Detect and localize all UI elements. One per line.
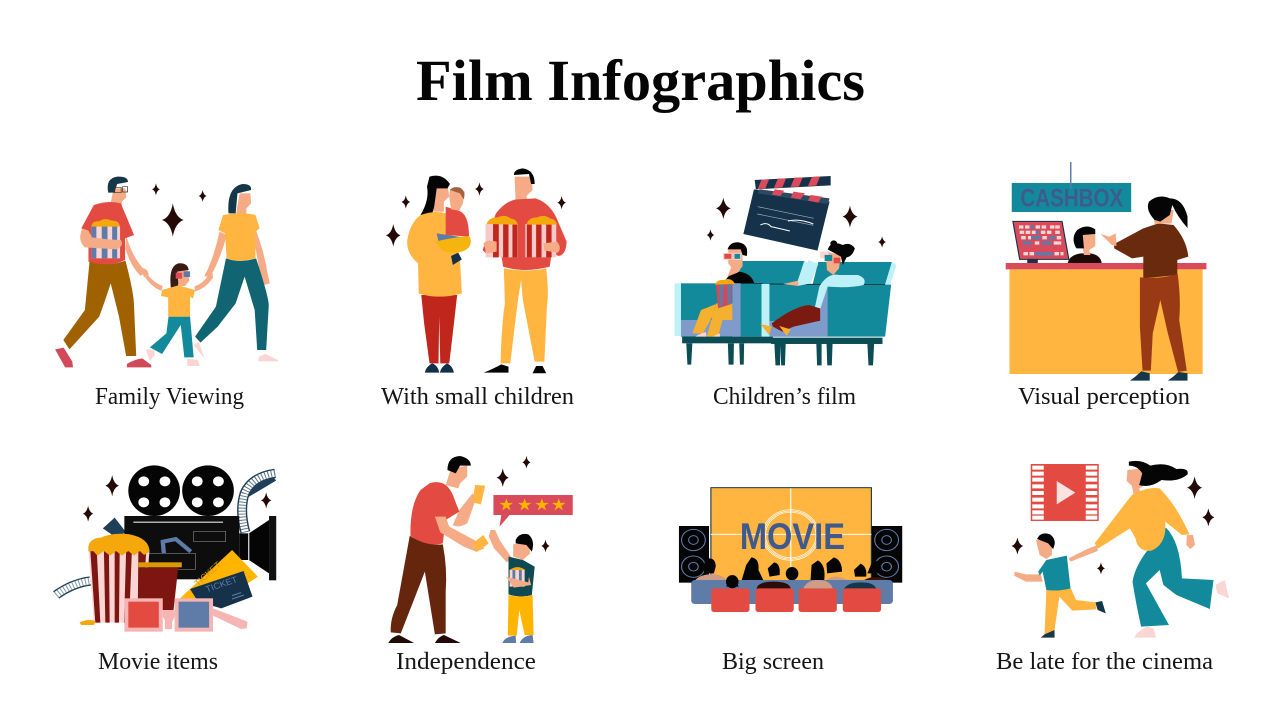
panel: big screen xyxy=(679,488,902,675)
illustration: mother pulling running boy xyxy=(1012,461,1229,638)
label: Visual perception: Visual perception xyxy=(1018,384,1190,410)
label: With small children: With small children xyxy=(381,384,574,410)
label: Family Viewing: Family Viewing xyxy=(95,384,244,410)
label: Children's film: Children’s film xyxy=(713,384,856,410)
illustration: parents with child and popcorn xyxy=(386,168,567,373)
label: Movie items: Movie items xyxy=(98,649,218,675)
illustration: kids on cinema seats with clapperboard xyxy=(675,176,896,365)
illustration: cashbox counter: CASHBOX xyxy=(1020,184,1124,212)
illustration: audience facing movie screen xyxy=(679,488,902,612)
illustration: projector, popcorn, tickets, 3D glasses xyxy=(56,465,276,632)
illustration: projector, popcorn, tickets, 3D glasses: TICKET xyxy=(204,574,239,594)
panel: movie items xyxy=(56,465,276,675)
title: Film Infographics xyxy=(416,48,865,113)
illustration: cashbox counter xyxy=(1006,162,1206,381)
label: Independence: Independence xyxy=(396,649,536,675)
panel: children's film xyxy=(675,176,896,410)
label: Be late for the cinema: Be late for the cinema xyxy=(996,649,1213,675)
illustration: audience facing movie screen: MOVIE xyxy=(740,516,845,557)
illustration: projector, popcorn, tickets, 3D glasses: TICKET xyxy=(192,559,224,588)
panel: be late for the cinema xyxy=(996,461,1229,675)
panel: independence xyxy=(388,456,573,675)
illustration: man handing ticket to boy xyxy=(388,456,573,643)
panel: with small children xyxy=(381,168,574,410)
panel: visual perception xyxy=(1006,162,1206,410)
label: Big screen: Big screen xyxy=(722,649,824,675)
illustration: family walking xyxy=(55,177,278,367)
panel: family viewing xyxy=(55,177,278,410)
